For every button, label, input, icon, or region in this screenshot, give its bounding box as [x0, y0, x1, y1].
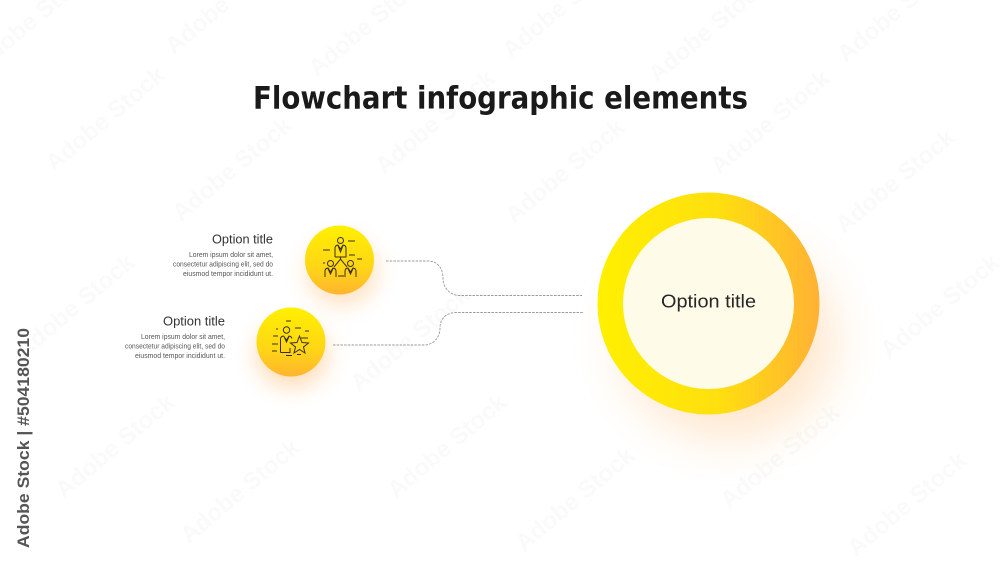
watermark pattern: Adobe Stock	[500, 113, 631, 229]
watermark pattern: Adobe Stock	[510, 441, 641, 557]
option 2 text block: Lorem ipsum dolor sit amet,	[141, 332, 225, 341]
icon: team hierarchy	[323, 238, 362, 277]
watermark pattern: Adobe Stock	[40, 61, 171, 177]
option 1 text block: consectetur adipiscing elit, sed do	[173, 260, 273, 268]
main circle	[598, 192, 834, 438]
option 1 circle	[305, 226, 377, 305]
option 1 text block: eiusmod tempor incididunt ut.	[183, 269, 273, 278]
main circle: Option title	[661, 292, 756, 312]
connector: bottom option to main circle	[333, 312, 584, 345]
option 2 text block: eiusmod tempor incididunt ut.	[135, 351, 225, 360]
stock id side label: Adobe Stock | #504180210	[14, 328, 33, 548]
watermark pattern: Adobe Stock	[382, 388, 513, 504]
watermark pattern: Adobe Stock	[705, 64, 836, 180]
option 1 text block: Lorem ipsum dolor sit amet,	[189, 250, 273, 259]
option 2 text block	[125, 314, 225, 360]
option 2 text block: Option title	[163, 314, 225, 328]
connector: top option to main circle	[386, 261, 582, 296]
watermark pattern: Adobe Stock	[10, 248, 141, 364]
watermark pattern: Adobe Stock	[50, 388, 181, 504]
watermark pattern: Adobe Stock	[345, 281, 476, 397]
option 2 text block: consectetur adipiscing elit, sed do	[125, 342, 225, 350]
option 1 text block: Option title	[212, 232, 273, 246]
watermark pattern: Adobe Stock	[175, 433, 306, 549]
title: Flowchart infographic elements	[253, 80, 748, 116]
watermark pattern: Adobe Stock	[167, 111, 298, 227]
watermark pattern: Adobe Stock	[715, 398, 846, 514]
watermark pattern: Adobe Stock	[830, 123, 961, 239]
watermark pattern: Adobe Stock	[370, 64, 501, 180]
option 2 circle	[256, 308, 328, 388]
icon: person with star	[272, 321, 309, 356]
watermark pattern: Adobe Stock	[842, 446, 973, 562]
option 1 text block	[173, 232, 273, 278]
